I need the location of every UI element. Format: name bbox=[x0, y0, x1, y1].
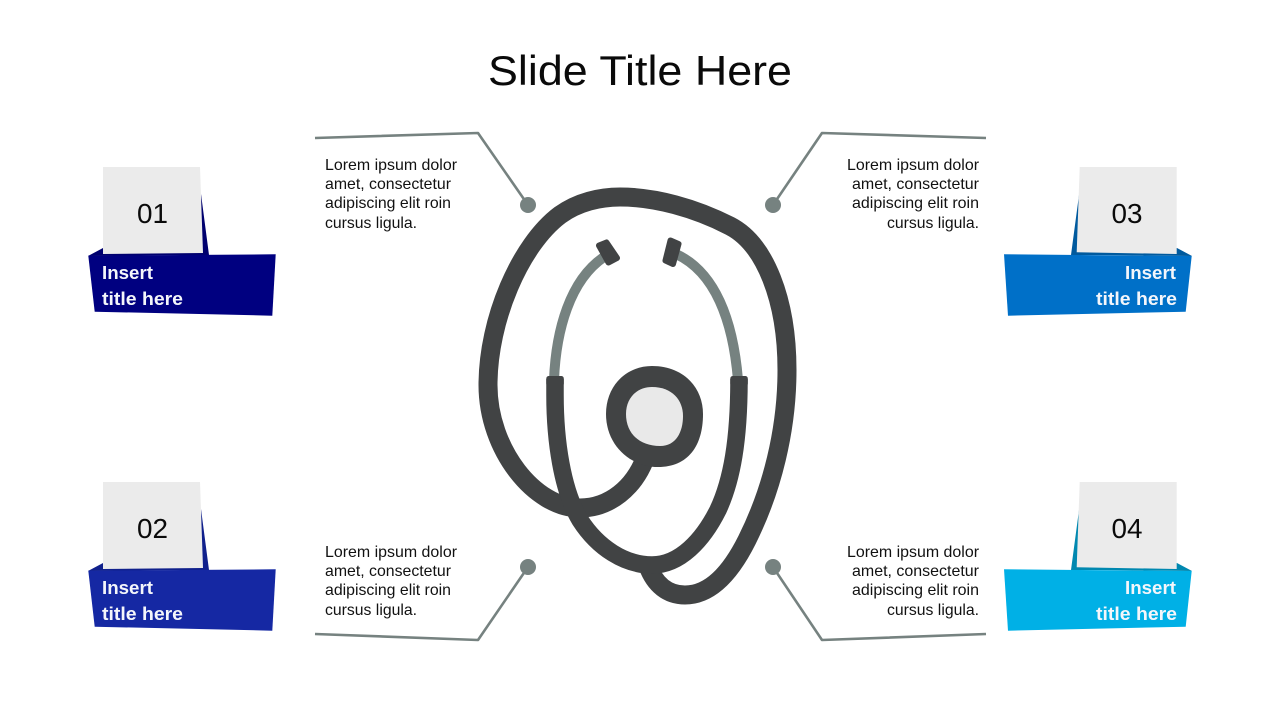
card 03 ribbon bbox=[1004, 254, 1192, 316]
left ear tube bbox=[554, 257, 604, 380]
chest piece bbox=[606, 366, 703, 467]
card 03 fold bbox=[1071, 195, 1192, 256]
card 03 heading: Insert bbox=[1125, 263, 1176, 283]
right ear tube bbox=[676, 254, 738, 380]
card 02 number tile bbox=[103, 482, 203, 569]
right ear tip bbox=[666, 240, 678, 264]
card 04 ribbon bbox=[1004, 569, 1192, 631]
card 01 bbox=[88, 167, 276, 316]
text block: top right: Lorem ipsum dolor bbox=[847, 157, 980, 174]
card 04 heading: title here bbox=[1096, 604, 1177, 624]
text block: bottom right: Lorem ipsum dolor bbox=[847, 544, 980, 561]
card 03 number tile bbox=[1077, 167, 1177, 254]
connector: bottom left bbox=[315, 559, 536, 640]
chest piece diaphragm bbox=[626, 387, 683, 446]
text block: bottom right: amet, consectetur bbox=[852, 563, 980, 580]
text block: bottom left: cursus ligula. bbox=[325, 602, 417, 619]
connector: top right bbox=[765, 133, 986, 213]
text block: top left: amet, consectetur bbox=[325, 176, 452, 193]
text block: bottom right: adipiscing elit roin bbox=[852, 582, 979, 599]
card 03 bbox=[1004, 167, 1192, 316]
card 04 number: 04 bbox=[1112, 513, 1142, 544]
text block: bottom left: adipiscing elit roin bbox=[325, 582, 451, 599]
card 04 fold bbox=[1071, 510, 1192, 571]
card 04 bbox=[1004, 482, 1192, 631]
connector: top left bbox=[315, 133, 536, 213]
text block: top right: cursus ligula. bbox=[887, 215, 979, 232]
text block: top right: amet, consectetur bbox=[852, 176, 980, 193]
card 02 heading: title here bbox=[102, 604, 183, 624]
text block: top left: cursus ligula. bbox=[325, 215, 417, 232]
text block: top right: adipiscing elit roin bbox=[852, 195, 979, 212]
card 02 fold bbox=[88, 509, 209, 571]
card 01 fold bbox=[88, 194, 209, 256]
text block: bottom left: Lorem ipsum dolor bbox=[325, 544, 458, 561]
card 02 heading: Insert bbox=[102, 578, 153, 598]
text block: bottom right: cursus ligula. bbox=[887, 602, 979, 619]
right tube cap bbox=[730, 376, 748, 386]
icon: stethoscope bbox=[488, 197, 787, 595]
left ear tip bbox=[599, 242, 617, 262]
main tube bbox=[488, 197, 787, 595]
card 03 heading: title here bbox=[1096, 289, 1177, 309]
text block: top left: adipiscing elit roin bbox=[325, 195, 451, 212]
title: Slide Title Here bbox=[488, 47, 792, 94]
card 01 heading: title here bbox=[102, 289, 183, 309]
card 01 number tile bbox=[103, 167, 203, 254]
card 01 ribbon bbox=[88, 254, 276, 316]
card 02 ribbon bbox=[88, 569, 276, 631]
card 03 number: 03 bbox=[1112, 198, 1142, 229]
card 04 heading: Insert bbox=[1125, 578, 1176, 598]
card 02 number: 02 bbox=[137, 513, 168, 544]
text block: bottom left: amet, consectetur bbox=[325, 563, 452, 580]
card 04 number tile bbox=[1077, 482, 1177, 569]
card 02 bbox=[88, 482, 276, 631]
left tube cap bbox=[546, 376, 564, 386]
card 01 number: 01 bbox=[137, 198, 168, 229]
inner tube bbox=[555, 379, 739, 565]
text block: top left: Lorem ipsum dolor bbox=[325, 157, 458, 174]
card 01 heading: Insert bbox=[102, 263, 153, 283]
connector: bottom right bbox=[765, 559, 986, 640]
